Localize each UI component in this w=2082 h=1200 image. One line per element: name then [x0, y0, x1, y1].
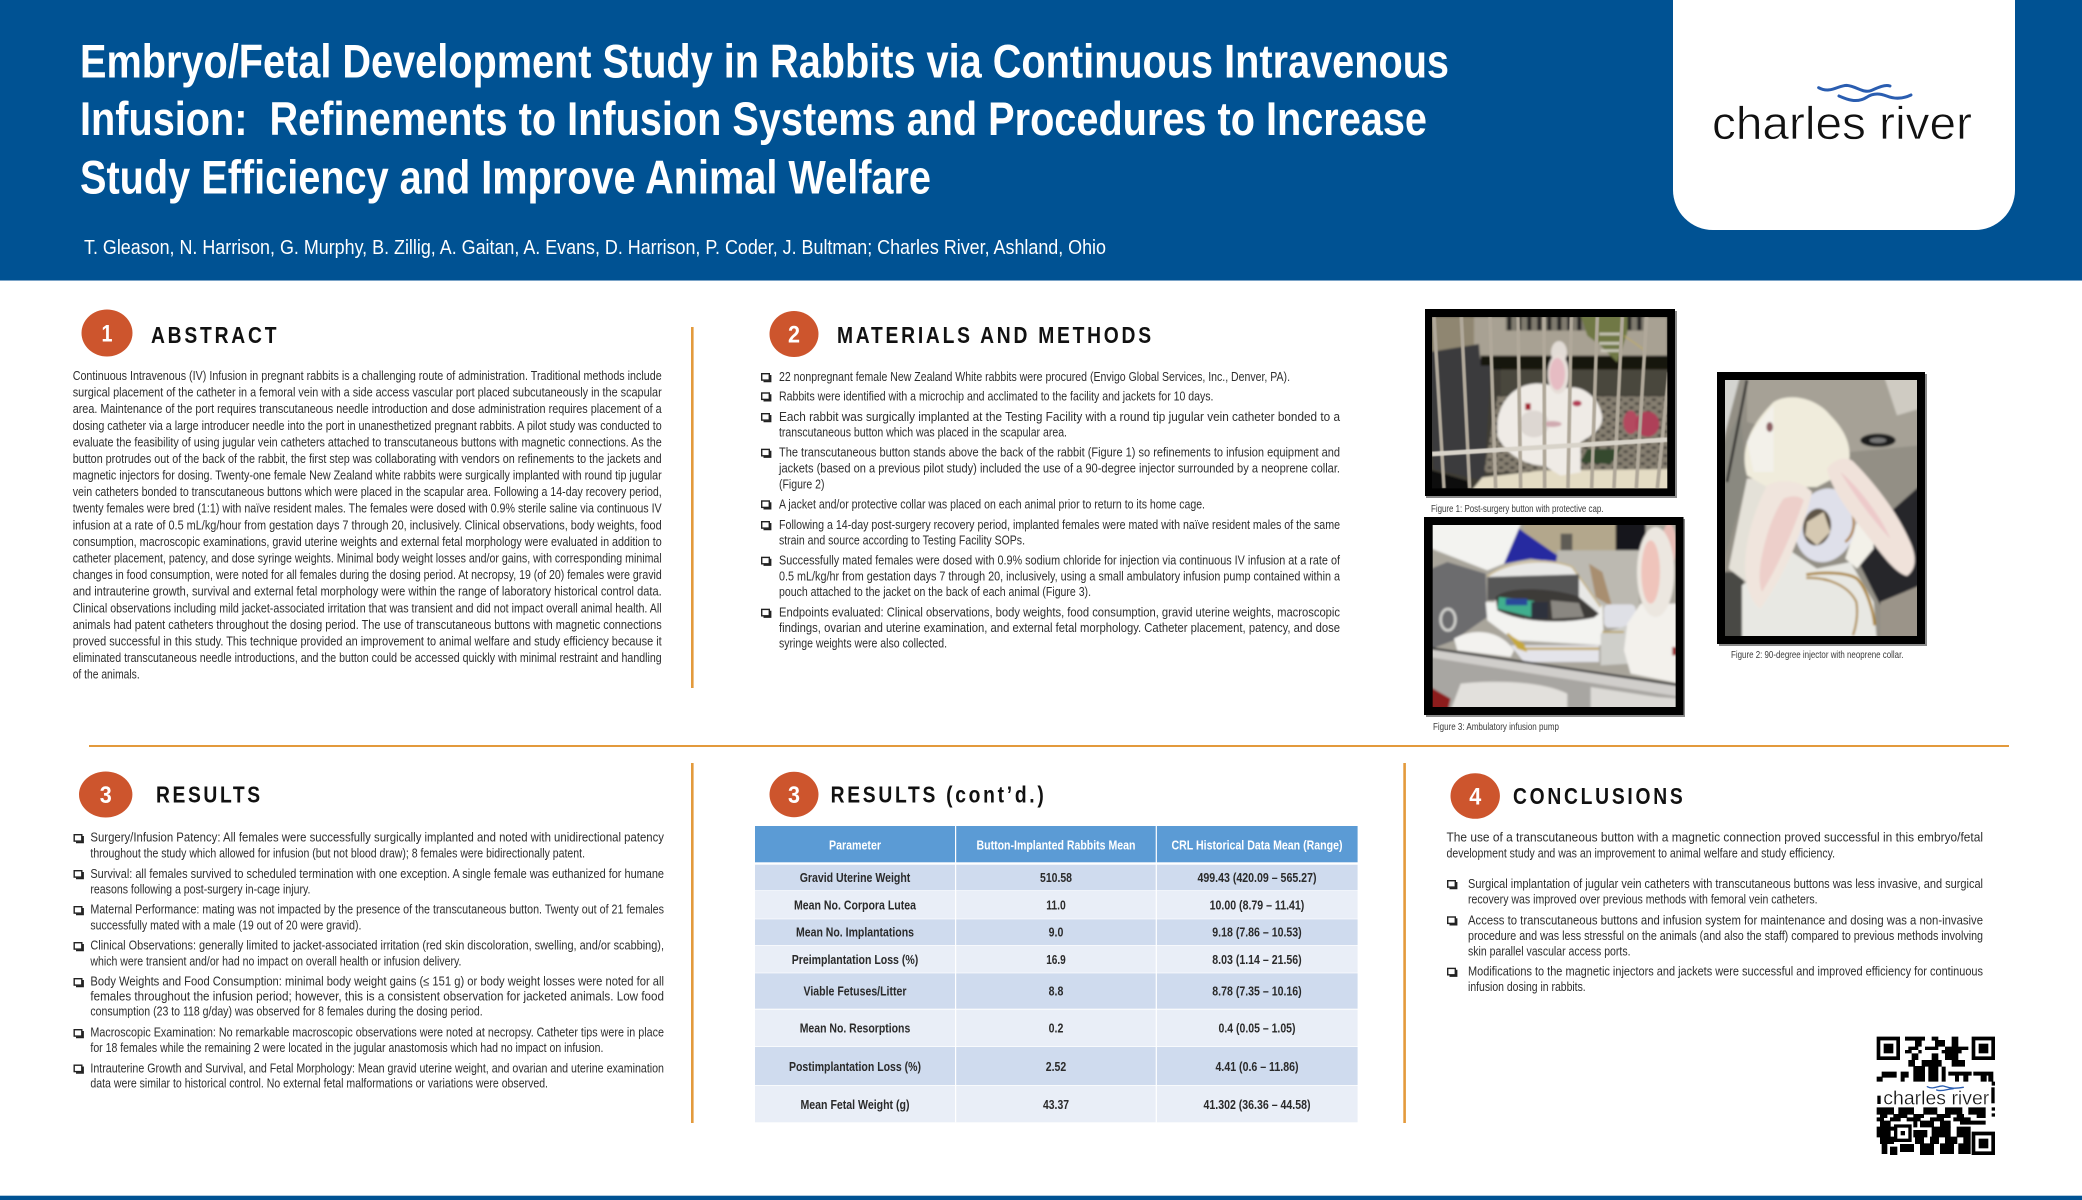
- results list: Body Weights and Food Consumption: minimal body weight gains (≤ 151 g) or body weight losses were noted for all: [90, 975, 664, 989]
- table row: implantations: Mean No. Implantations: [796, 926, 914, 940]
- conclusions heading: CONCLUSIONS: [1513, 783, 1683, 809]
- section number 4: 4: [1469, 784, 1482, 810]
- abstract body text: and intrauterine growth, survival and external fetal morphology were within the range of laboratory historical control data.: [73, 585, 662, 599]
- materials and methods list: Each rabbit was surgically implanted at the Testing Facility with a round tip jugular vein catheter bonded to a: [779, 410, 1340, 424]
- results list: females throughout the infusion period; however, this is a consistent observation for jacketed animals. Low food: [90, 989, 664, 1003]
- section number 1: 1: [102, 320, 112, 348]
- table row: postimplantation loss: 2.52: [1046, 1060, 1066, 1074]
- conclusions paragraph: [1446, 831, 1983, 860]
- figure 2: 90-degree injector with collar: [1717, 372, 1927, 646]
- table row: resorptions: 0.2: [1049, 1022, 1063, 1036]
- abstract heading: ABSTRACT: [151, 322, 276, 348]
- panel: materials and methods: [762, 311, 1340, 651]
- data table: [755, 826, 1358, 1122]
- materials and methods checkboxes: [762, 374, 771, 617]
- section number 3: 3: [100, 782, 112, 809]
- materials and methods list: findings, ovarian and uterine examination, and external fetal morphology. Catheter placement, patency, and dose: [779, 621, 1340, 635]
- results list: reasons following a post-surgery in-cage injury.: [90, 883, 310, 897]
- title: Study Efficiency and Improve Animal Welfare: [80, 152, 931, 204]
- results list: Surgery/Infusion Patency: All females were successfully surgically implanted and noted with unidirectional patency: [90, 831, 665, 845]
- table row: postimplantation loss: 4.41 (0.6 – 11.86): [1216, 1060, 1298, 1074]
- table row: fetal weight: 43.37: [1043, 1098, 1069, 1112]
- section number 3 continued: 3: [788, 782, 800, 809]
- table row: preimplantation loss: Preimplantation Loss (%): [792, 953, 918, 967]
- abstract body text: proved successful in this study. This technique provided an improvement to animal welfare and study efficiency because it: [73, 634, 662, 648]
- abstract body text: of the animals.: [73, 668, 140, 682]
- results continued heading: RESULTS (cont’d.): [831, 782, 1044, 808]
- table row: viable fetuses: 8.8: [1049, 984, 1063, 998]
- logo: charles river: [1673, 0, 2015, 230]
- abstract body text: animals had patent catheters throughout the dosing period. The use of transcutaneous buttons with magnetic connections: [73, 618, 662, 632]
- authors: T. Gleason, N. Harrison, G. Murphy, B. Zillig, A. Gaitan, A. Evans, D. Harrison, P. Coder, J. Bultman; Charles River, Ashland, Ohio: [84, 236, 1106, 259]
- results list: which were transient and/or had no impact on overall health or infusion delivery.: [90, 954, 461, 968]
- abstract body text: area. Maintenance of the port requires transcutaneous needle introduction and dose administration requires placement of a: [73, 402, 662, 416]
- table row: postimplantation loss: [755, 1047, 1358, 1085]
- abstract body text: eliminated transcutaneous needle introductions, and the button could be accessed quickly with minimal restraint and handling: [73, 651, 662, 665]
- abstract body text: Continuous Intravenous (IV) Infusion in pregnant rabbits is a challenging route of administration. Traditional methods include: [73, 369, 662, 383]
- abstract body text: dosing catheter via a large introducer needle into the port in unanesthetized pregnant rabbits. A pilot study was conducted to: [73, 419, 662, 433]
- abstract body text: button protrudes out of the back of the rabbit, the first step was collaborating with vendors on refinements to the jackets and: [73, 452, 662, 466]
- section number 1: [82, 310, 132, 356]
- table row: preimplantation loss: [755, 946, 1358, 973]
- header band: [0, 0, 2082, 281]
- table row: implantations: 9.0: [1049, 926, 1063, 940]
- panel: results continued: [755, 772, 1358, 1122]
- abstract body text: vein catheters bonded to transcutaneous buttons which were placed in the scapular area. Following a 14-day recovery period,: [73, 485, 662, 499]
- section number 2: 2: [788, 322, 800, 348]
- figure 2 caption: Figure 2: 90-degree injector with neoprene collar.: [1731, 650, 1904, 661]
- section number 3 continued: [770, 772, 818, 817]
- results list: for 18 females while the remaining 2 were located in the jugular anastomosis which had no impact on infusion.: [90, 1041, 603, 1055]
- figure 1 caption: Figure 1: Post-surgery button with protective cap.: [1431, 504, 1604, 515]
- conclusions list: skin parallel vascular access ports.: [1468, 945, 1630, 959]
- table header row: [755, 826, 1358, 862]
- materials and methods list: 22 nonpregnant female New Zealand White rabbits were procured (Envigo Global Services, Inc., Denver, PA).: [779, 370, 1290, 384]
- results list: [90, 831, 665, 1091]
- title: Infusion: Refinements to Infusion Systems and Procedures to Increase: [80, 93, 1427, 146]
- conclusions list: [1468, 877, 1983, 994]
- results list: consumption (23 to 118 g/day) was observed for 8 females during the dosing period.: [90, 1005, 483, 1019]
- panel: results: [74, 772, 665, 1091]
- materials and methods list: 0.5 mL/kg/hr from gestation days 7 through 20, inclusively, using a small ambulatory infusion pump contained within a: [779, 569, 1340, 583]
- table row: fetal weight: Mean Fetal Weight (g): [800, 1098, 910, 1112]
- table row: resorptions: 0.4 (0.05 – 1.05): [1218, 1022, 1296, 1036]
- conclusions list: recovery was improved over previous methods with femoral vein catheters.: [1468, 893, 1818, 907]
- figure 1: rabbit in cage: [1424, 309, 1677, 498]
- materials and methods list: syringe weights were also collected.: [779, 637, 947, 651]
- results list: data were similar to historical control. No external fetal malformations or variations were observed.: [90, 1077, 548, 1091]
- panel: abstract: [73, 310, 662, 682]
- abstract body text: evaluate the feasibility of using jugular vein catheters attached to transcutaneous buttons with magnetic connections. As the: [73, 435, 662, 449]
- abstract body text: twenty females were bred (1:1) with naïve resident males. The females were dosed with 0.9% sterile saline via continuous IV: [73, 502, 662, 516]
- materials and methods list: The transcutaneous button stands above the back of the rabbit (Figure 1) so refinements to infusion equipment and: [779, 446, 1340, 460]
- conclusions list: procedure and was less stressful on the animals (and also the staff) compared to previous methods involving: [1468, 929, 1983, 943]
- figure 3: ambulatory infusion pump: [1424, 517, 1685, 717]
- table row: fetal weight: 41.302 (36.36 – 44.58): [1204, 1098, 1310, 1112]
- QR code with charles river logo: [1877, 1037, 1995, 1155]
- materials and methods list: transcutaneous button which was placed in the scapular area.: [779, 426, 1067, 440]
- abstract body text: surgical placement of the catheter in a femoral vein with a side access vascular port placed subcutaneously in the scapular: [73, 386, 662, 400]
- table row: gravid uterine weight: 510.58: [1040, 871, 1072, 885]
- materials and methods list: Rabbits were identified with a microchip and acclimated to the facility and jackets for 10 days.: [779, 389, 1214, 403]
- abstract body text: [73, 369, 662, 682]
- materials and methods list: jackets (based on a previous pilot study) included the use of a 90-degree injector surrounded by a neoprene collar.: [778, 461, 1340, 475]
- table row: gravid uterine weight: Gravid Uterine Weight: [800, 871, 911, 885]
- conclusions paragraph: The use of a transcutaneous button with a magnetic connection proved successful in this embryo/fetal: [1446, 831, 1983, 845]
- table row: postimplantation loss: Postimplantation Loss (%): [789, 1060, 921, 1074]
- materials and methods list: Endpoints evaluated: Clinical observations, body weights, food consumption, gravid uterine weights, macroscopic: [779, 606, 1340, 620]
- results list: Maternal Performance: mating was not impacted by the presence of the transcutaneous button. Twenty out of 21 females: [90, 903, 664, 917]
- title: [80, 36, 1449, 204]
- table row: gravid uterine weight: 499.43 (420.09 – 565.27): [1198, 871, 1316, 885]
- materials and methods list: Successfully mated females were dosed with 0.9% sodium chloride for injection via continuous IV infusion at a rate of: [779, 554, 1340, 568]
- conclusions list: Modifications to the magnetic injectors and jackets were successful and improved efficiency for continuous: [1468, 965, 1983, 979]
- title: Embryo/Fetal Development Study in Rabbits via Continuous Intravenous: [80, 36, 1449, 88]
- panel: conclusions: [1446, 773, 1983, 994]
- table row: viable fetuses: Viable Fetuses/Litter: [804, 984, 907, 998]
- results list: Clinical Observations: generally limited to jacket-associated irritation (red skin discoloration, swelling, and/or scabbing),: [90, 939, 664, 953]
- table row: implantations: 9.18 (7.86 – 10.53): [1212, 926, 1302, 940]
- table row: fetal weight: [755, 1086, 1358, 1122]
- table row: preimplantation loss: 16.9: [1046, 953, 1066, 967]
- materials and methods list: pouch attached to the jacket on the back of each animal (Figure 3).: [779, 585, 1091, 599]
- table header row: CRL Historical Data Mean (Range): [1172, 839, 1342, 853]
- conclusions list: Access to transcutaneous buttons and infusion system for maintenance and dosing was a non-invasive: [1468, 913, 1983, 927]
- conclusions list: Surgical implantation of jugular vein catheters with transcutaneous buttons was less invasive, and surgical: [1468, 877, 1983, 891]
- QR code with charles river logo: charles river: [1883, 1088, 1990, 1110]
- table row: viable fetuses: 8.78 (7.35 – 10.16): [1212, 984, 1302, 998]
- table row: corpora lutea: Mean No. Corpora Lutea: [794, 898, 917, 912]
- table row: corpora lutea: 10.00 (8.79 – 11.41): [1210, 898, 1304, 912]
- materials and methods list: (Figure 2): [779, 477, 824, 491]
- table row: corpora lutea: 11.0: [1046, 898, 1066, 912]
- results list: Intrauterine Growth and Survival, and Fetal Morphology: Mean gravid uterine weight, and ovarian and uterine examination: [90, 1061, 664, 1075]
- results list: Macroscopic Examination: No remarkable macroscopic observations were noted at necropsy. Catheter tips were in place: [90, 1026, 664, 1040]
- materials and methods list: Following a 14-day post-surgery recovery period, implanted females were mated with naïve resident males of the same: [779, 518, 1340, 532]
- abstract body text: consumption, macroscopic examinations, gravid uterine weights and external fetal morphology were evaluated in addition to: [73, 535, 662, 549]
- results checkboxes: [74, 835, 83, 1073]
- table row: corpora lutea: [755, 891, 1358, 919]
- table row: implantations: [755, 919, 1358, 945]
- results list: successfully mated with a male (19 out of 20 were gravid).: [90, 918, 361, 932]
- section number 2: [770, 311, 818, 357]
- conclusions list: infusion dosing in rabbits.: [1468, 980, 1586, 994]
- abstract body text: magnetic injectors for dosing. Twenty-one female New Zealand white rabbits were surgically implanted with round tip jugular: [73, 468, 662, 482]
- abstract body text: changes in food consumption, were noted for all females during the dosing period. At necropsy, 19 (of 20) females were gravid: [73, 568, 662, 582]
- table row: resorptions: [755, 1010, 1358, 1046]
- table row: resorptions: Mean No. Resorptions: [800, 1022, 910, 1036]
- table row: gravid uterine weight: [755, 865, 1358, 890]
- table header row: Parameter: [829, 839, 881, 853]
- abstract body text: catheter placement, patency, and dose syringe weights. Minimal body weight losses and/or gains, with corresponding minimal: [73, 552, 662, 566]
- conclusions checkboxes: [1448, 881, 1457, 976]
- section number 4: [1450, 773, 1500, 819]
- table row: viable fetuses: [755, 973, 1358, 1009]
- abstract body text: infusion at a rate of 0.5 mL/kg/hour from gestation days 7 through 20, inclusively. Clinical observations, body weights, food: [73, 518, 662, 532]
- section number 3: [79, 772, 132, 818]
- abstract body text: Clinical observations including mild jacket-associated irritation that was transient and did not impact overall animal health. All: [73, 601, 662, 615]
- materials and methods heading: MATERIALS AND METHODS: [837, 322, 1151, 348]
- results list: throughout the study which allowed for infusion (but not blood draw); 8 females were bidirectionally patent.: [90, 846, 585, 860]
- table header row: Button-Implanted Rabbits Mean: [976, 839, 1136, 853]
- materials and methods list: [778, 370, 1340, 651]
- results heading: RESULTS: [156, 782, 260, 808]
- results list: Survival: all females survived to scheduled termination with one exception. A single female was euthanized for humane: [90, 867, 664, 881]
- table row: preimplantation loss: 8.03 (1.14 – 21.56): [1212, 953, 1302, 967]
- logo: charles river: charles river: [1712, 97, 1972, 149]
- materials and methods list: strain and source according to Testing Facility SOPs.: [779, 534, 1025, 548]
- materials and methods list: A jacket and/or protective collar was placed on each animal prior to return to its home cage.: [779, 497, 1205, 511]
- conclusions paragraph: development study and was an improvement to animal welfare and study efficiency.: [1446, 846, 1835, 860]
- figure 3 caption: Figure 3: Ambulatory infusion pump: [1433, 722, 1559, 733]
